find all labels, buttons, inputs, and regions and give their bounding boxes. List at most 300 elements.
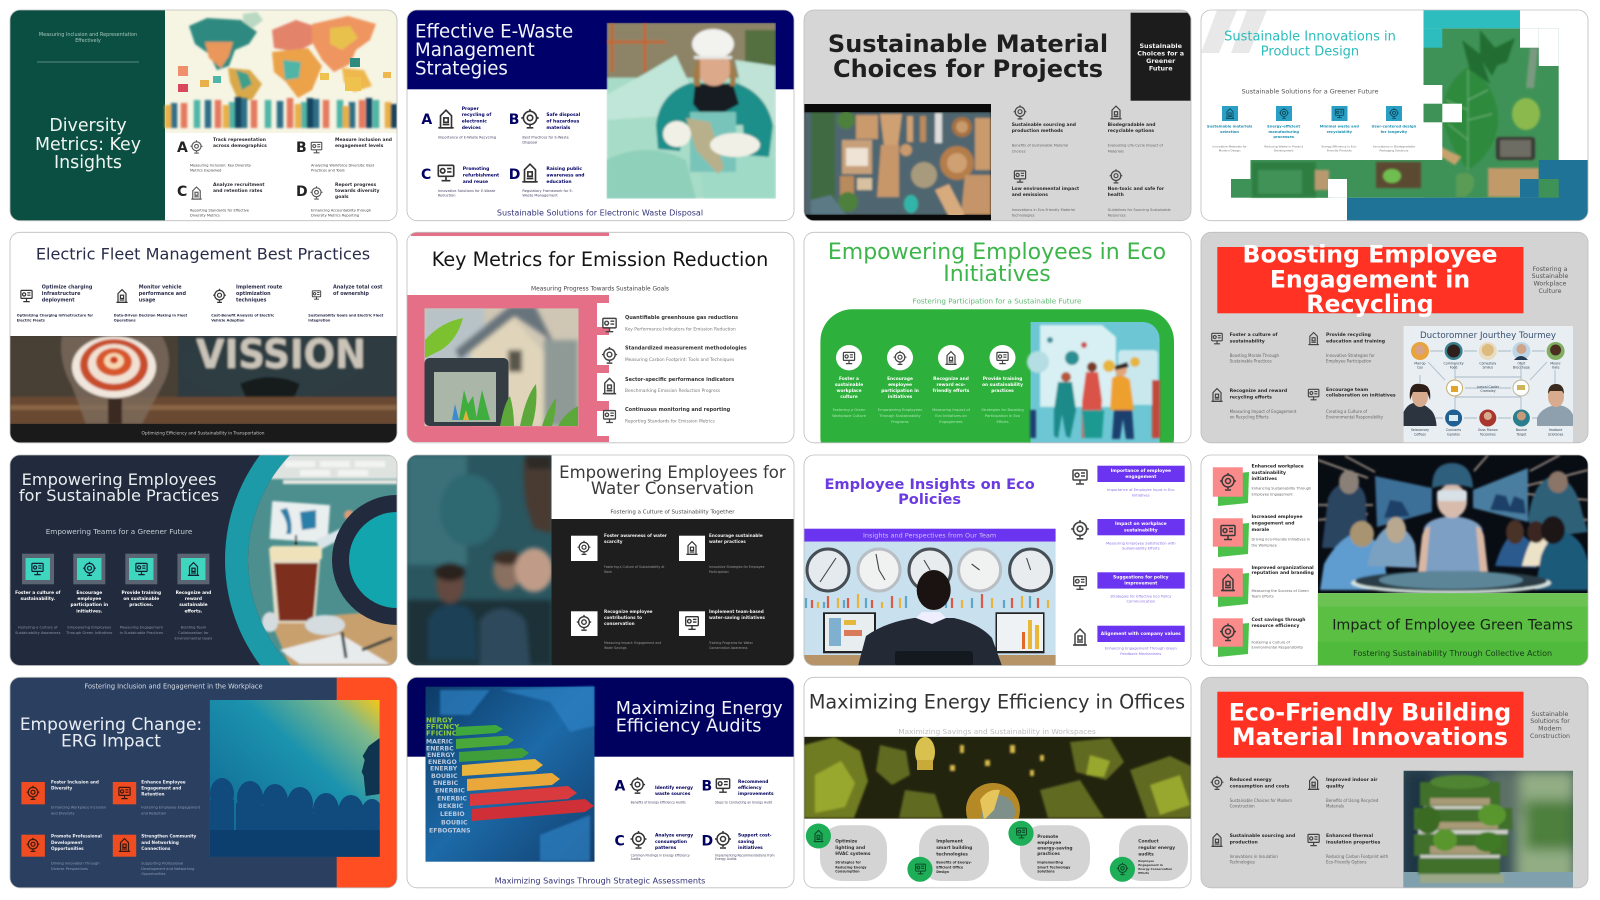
band <box>804 529 1056 542</box>
item B: engagement levels <box>335 143 384 149</box>
item: team saving: Training Programs for Water <box>708 641 754 645</box>
chart: journey diagram: Coy <box>1417 366 1423 370</box>
item D: Support cost- <box>738 832 772 838</box>
column: waste <box>1320 106 1359 153</box>
item C: Reduction <box>438 194 456 198</box>
image: efficiency rating bars <box>426 686 594 862</box>
subtitle <box>39 32 137 44</box>
item C: Diversity Metrics <box>190 213 220 217</box>
item: collaboration: Creating a Culture of <box>1326 409 1368 414</box>
item: engagement <box>113 780 201 815</box>
column: energy: Reducing Waste in Product <box>1264 145 1304 149</box>
item A: Measuring Inclusion: Key Diversity <box>190 163 251 167</box>
item: sector <box>603 377 734 394</box>
chart: journey diagram: Coffees <box>1414 432 1426 436</box>
item: suggestions: improvement <box>1124 580 1157 586</box>
item: suggestions: Communication <box>1126 600 1155 604</box>
top caption: Fostering Inclusion and Engagement in the Workplace <box>84 683 263 691</box>
title: Policies <box>898 491 961 508</box>
item: reward <box>932 345 971 424</box>
image: efficiency rating bars: FFICINCY <box>426 730 463 738</box>
subtitle: Effectively <box>75 38 101 44</box>
item A: waste sources <box>655 791 691 797</box>
item: practices <box>679 533 764 574</box>
illustration: team <box>1027 322 1160 443</box>
item: awareness: Foster awareness of water <box>604 533 668 538</box>
item: standardized: Measuring Carbon Footprint: Tools and Techniques <box>625 357 735 363</box>
side label: Greener <box>1146 57 1176 65</box>
item C <box>614 831 693 861</box>
item: enhanced: sustainability <box>1252 470 1286 476</box>
item: alignment <box>1073 626 1185 656</box>
item: education: Innovative Strategies for <box>1326 353 1375 358</box>
item: air quality: Benefits of Using Recycled <box>1326 798 1379 803</box>
item: energy costs: Reduced energy <box>1230 777 1272 783</box>
image: efficiency rating bars: MAERIC <box>426 738 453 746</box>
item: enhanced: Enhancing Sustainability Through <box>1252 487 1311 491</box>
panel: Water Conservation <box>407 455 794 666</box>
item: collaboration: collaboration on initiatives <box>1326 392 1396 398</box>
image: man watching clocks and dashboards <box>804 542 1056 666</box>
item: morale: Driving Eco-Friendly Initiatives in <box>1252 537 1310 541</box>
image: vision target and bulb <box>10 331 397 424</box>
side text: Sustainable <box>1532 711 1569 718</box>
item: low impact: Low environmental impact <box>1012 186 1080 192</box>
item: awareness: Fostering a Culture of Sustainability at <box>604 565 665 569</box>
column: materials: Innovative Materials for <box>1212 145 1248 149</box>
image: green building model <box>1403 770 1575 888</box>
item: practices: Innovative Strategies for Employee <box>709 565 764 569</box>
chart: journey diagram: Meonc <box>1550 362 1561 366</box>
item: morale <box>1213 514 1310 557</box>
item: inclusion: and Diversity <box>51 811 75 815</box>
item: monitoring: Continuous monitoring and reporting <box>625 407 731 413</box>
item: development: Driving Innovation Through <box>51 862 100 866</box>
item: reputation: reputation and branding <box>1252 570 1314 576</box>
title: Sustainable Innovations in <box>1224 30 1396 44</box>
chart: journey diagram: Ispratos <box>1447 432 1460 436</box>
item A: Track representation <box>213 137 266 143</box>
image: efficiency rating bars: EFBOGTANS <box>429 828 471 834</box>
item A <box>177 137 267 172</box>
item: audits: Employee <box>1138 859 1154 863</box>
panel: Electric Fleet <box>10 232 397 443</box>
column: user centered: for longevity <box>1381 130 1408 134</box>
item: route: optimization <box>236 291 271 297</box>
item B: B <box>296 140 307 156</box>
item: culture: Foster a culture of <box>15 590 61 596</box>
title <box>824 476 1035 508</box>
item: culture <box>1212 332 1279 364</box>
item: route: techniques <box>236 298 266 304</box>
item B: B <box>509 112 519 128</box>
title <box>616 699 783 737</box>
item: air quality: Materials <box>1326 804 1344 808</box>
item: recognize: Collaboration for <box>178 631 209 635</box>
item B: Disposal <box>522 141 537 145</box>
item: alignment: Alignment with company values <box>1101 631 1181 637</box>
item: audits: Energy Conservation <box>1138 867 1172 871</box>
item: awareness: Work <box>604 570 612 574</box>
image: efficiency rating bars: BOUBIC <box>441 820 468 826</box>
item: standardized <box>602 346 747 363</box>
item A: Benefits of Energy Efficiency Audits <box>631 800 686 804</box>
image: efficiency rating bars: FFICNCY <box>426 723 460 731</box>
item A: A <box>614 779 626 795</box>
item: culture: Foster a <box>839 376 859 382</box>
item: community: Opportunities <box>141 872 166 876</box>
item C: Promoting <box>463 166 489 172</box>
item: sourcing: Choices <box>1012 149 1026 153</box>
chart: journey diagram: Cunnants <box>1446 428 1462 432</box>
header: Water Conservation <box>591 479 754 498</box>
item: recognize: Recognize and <box>176 590 211 596</box>
item: culture: Boosting Morale Through <box>1230 353 1279 358</box>
title: Maximizing Energy <box>616 699 783 719</box>
item: culture: culture <box>840 394 858 400</box>
title: Strategies <box>415 58 508 80</box>
item: community: Strengthen Community <box>141 834 197 838</box>
item: recognize <box>174 554 212 640</box>
pink block <box>407 295 609 442</box>
item B: Recommend <box>738 779 768 785</box>
item B: improvements <box>738 791 774 797</box>
item: biodegradable: recyclable options <box>1108 128 1154 134</box>
title <box>19 470 219 505</box>
chart: journey diagram: Oate <box>1552 366 1559 370</box>
item D: Energy Audits <box>715 857 737 861</box>
item: importance: Importance of employee <box>1111 468 1171 474</box>
image: efficiency rating bars: ENEBIC <box>433 780 459 787</box>
item: non-toxic: Non-toxic and safe for <box>1108 186 1165 192</box>
item D: Regulatory Framework for E- <box>522 189 574 193</box>
header: Fostering a Culture of Sustainability Together <box>610 510 735 516</box>
item B <box>702 779 774 804</box>
item C: Audits <box>631 857 641 861</box>
chart: journey diagram: Marrop <box>1414 362 1426 366</box>
chart: journey diagram: Tecoomes <box>1479 432 1496 436</box>
item: importance <box>1073 466 1185 498</box>
chart: journey diagram <box>1404 326 1573 443</box>
item A: Identify energy <box>655 785 693 791</box>
title <box>1217 240 1524 318</box>
item: training: Provide training <box>983 376 1022 382</box>
item: participation: participation in <box>881 388 919 394</box>
item: culture: Fostering a Culture of <box>18 626 58 630</box>
item D: Enhancing Accountability through <box>311 208 371 212</box>
item: community: Development and Networking <box>141 867 194 871</box>
panel: Sustainable Practices <box>10 385 575 735</box>
item: participation: Empowering Employees <box>878 408 922 412</box>
panel: Building Materials <box>1201 677 1588 888</box>
chart: journey diagram: Commoncity <box>1444 362 1464 366</box>
item: importance: Importance of Employee Input in Eco <box>1107 488 1175 492</box>
footer bar: Optimizing Efficiency and Sustainability in Transportation <box>142 430 265 436</box>
item: low impact: Innovations in Eco-Friendly Material <box>1012 208 1075 212</box>
item: contributions: Recognize employee <box>604 609 653 614</box>
item A: A <box>421 112 432 128</box>
title: Engagement in <box>1270 265 1470 293</box>
item: community: Supporting Professional <box>141 862 183 866</box>
panel: Recycling Engagement <box>1201 232 1588 443</box>
item: engagement: Enhance Employee <box>141 780 186 784</box>
item C: C <box>177 184 187 200</box>
title block: Impact of Employee Green Teams <box>1332 618 1573 634</box>
item: lighting: Optimize <box>835 838 857 844</box>
column: user centered <box>1372 106 1417 153</box>
title <box>828 30 1108 83</box>
band: Insights and Perspectives from Our Team <box>863 531 996 539</box>
item: culture: sustainability. <box>21 596 55 602</box>
title: Effective E-Waste <box>415 22 573 42</box>
item: alignment: Feedback Mechanisms <box>1120 652 1161 656</box>
item: air quality: quality <box>1326 784 1344 790</box>
item: participation: Encourage <box>887 376 913 382</box>
item D: Implementing Recommendations from <box>715 853 774 857</box>
item A: Metrics Explained <box>190 168 221 172</box>
side text: Construction <box>1530 733 1570 740</box>
side text <box>1532 266 1569 295</box>
item: team saving <box>679 609 765 650</box>
title block <box>1318 593 1588 666</box>
item: non-toxic: health <box>1108 192 1124 198</box>
item: monitor: performance and <box>139 291 187 297</box>
item C: and reuse <box>463 179 488 185</box>
image: iced drink on desk <box>240 455 400 666</box>
chart: journey diagram: Bouine <box>1516 428 1527 432</box>
item A: across demographics <box>213 143 267 149</box>
item: cost <box>308 284 384 322</box>
item: recognize: Environmental Goals <box>174 636 212 640</box>
item: community <box>113 834 197 876</box>
subtitle: Measuring Inclusion and Representation <box>39 32 137 38</box>
item: culture: Sustainable Practices <box>1230 358 1272 364</box>
item: suggestions <box>1074 572 1185 604</box>
item: participation: Empowering Employees <box>67 626 111 630</box>
item: energy costs <box>1211 776 1292 808</box>
title: Employee Insights on Eco <box>824 476 1035 493</box>
title <box>20 715 202 751</box>
item: smart building: Benefits of Energy- <box>936 861 972 865</box>
item: employee practices: Smart Technology <box>1037 865 1071 869</box>
item: employee practices: Solutions <box>1037 870 1055 874</box>
image: world map and crowd <box>165 10 397 133</box>
item: reputation: Measuring the Success of Green <box>1252 589 1309 593</box>
subtitle: Fostering Participation for a Sustainable Future <box>913 296 1082 306</box>
item A: recycling of <box>462 112 491 118</box>
item: employee practices: practices <box>1037 851 1060 857</box>
title: Electric Fleet Management Best Practices <box>36 244 370 264</box>
column: waste: recyclability <box>1327 130 1353 134</box>
item: sourcing: Benefits of Sustainable Material <box>1012 144 1068 148</box>
title: Recycling <box>1306 290 1434 318</box>
item: air quality <box>1308 777 1379 808</box>
item: training: Participation in Eco <box>985 414 1021 418</box>
title <box>35 116 141 173</box>
item C: Reporting Standards for Effective <box>190 208 249 212</box>
item C: and retention rates <box>213 188 263 194</box>
item: reward <box>1211 388 1297 420</box>
subtitle: Maximizing Savings and Sustainability in Workspaces <box>898 727 1096 736</box>
item: route: Vehicle Adoption <box>211 318 245 322</box>
item: contributions: Water Savings <box>604 646 627 650</box>
item: morale: Increased employee <box>1252 514 1303 520</box>
column: energy: Energy-efficient <box>1267 125 1300 129</box>
item: sourcing <box>1012 105 1076 153</box>
item: smart building: Efficient Office <box>936 865 964 869</box>
item: training <box>120 554 164 635</box>
item: suggestions: Strategies for Effective Eco Policy <box>1110 594 1172 598</box>
item: reward: reward eco- <box>936 382 966 388</box>
item: sourcing: Innovations in Insulation <box>1230 854 1278 859</box>
image: kraft materials flat lay <box>804 104 991 221</box>
item: reputation <box>1213 565 1314 607</box>
title: Key Metrics for Emission Reduction <box>432 248 768 271</box>
image: efficiency rating bars: NERGY <box>426 717 454 725</box>
item: cost: Fostering a Culture of <box>1252 640 1291 644</box>
column: waste: Energy Efficiency in Eco- <box>1321 145 1357 149</box>
item: lighting <box>806 824 887 881</box>
item D: D <box>296 184 308 200</box>
item: charging: infrastructure <box>42 291 81 297</box>
title: for Sustainable Practices <box>19 486 219 505</box>
item: reward: friendly efforts <box>933 388 970 394</box>
item: practices: Encourage sustainable <box>709 533 763 538</box>
item: impact: Sustainability Efforts <box>1122 547 1160 551</box>
quote marks <box>1201 10 1267 53</box>
image: house and monitor <box>424 306 578 426</box>
side text: Modern <box>1538 726 1562 732</box>
item C: patterns <box>655 845 677 851</box>
item: culture <box>832 345 867 418</box>
item: route: Cost-Benefit Analysis of Electric <box>211 313 274 317</box>
item: audits: Engagement in <box>1138 863 1163 867</box>
chart: journey diagram: Ouss Rionon <box>1478 428 1498 432</box>
item: audits: regular energy <box>1138 845 1175 851</box>
item A <box>421 106 496 140</box>
item: suggestions: Suggestions for policy <box>1113 574 1169 580</box>
item D: Raising public <box>546 166 582 172</box>
image: efficiency rating bars: ENERBY <box>430 766 458 772</box>
header <box>552 455 794 519</box>
chart: journey diagram: Sciotones <box>1548 432 1564 436</box>
item: participation: employee <box>77 596 101 602</box>
item: recognize: sustainable <box>179 602 208 608</box>
item: reward: Recognize and reward <box>1230 388 1287 394</box>
item D: Report progress <box>335 182 376 188</box>
item A: A <box>177 140 188 156</box>
item B: Safe disposal <box>546 112 581 118</box>
item: non-toxic: Guidelines for Sourcing Sustainable <box>1108 208 1171 212</box>
item: biodegradable: Biodegradable and <box>1108 122 1156 128</box>
item: greenhouse: Key Performance Indicators for Emission Reduction <box>625 326 736 332</box>
item C <box>177 182 265 217</box>
item: greenhouse: Quantifiable greenhouse gas reductions <box>625 315 738 321</box>
item: culture: Sustainability Awareness <box>15 631 61 635</box>
item: smart building: smart building <box>936 845 972 851</box>
title <box>415 22 573 80</box>
item: development <box>21 834 102 871</box>
item C: C <box>421 167 431 183</box>
chart: journey diagram: Brocchope <box>1513 366 1530 370</box>
subtitle: Sustainable Solutions for a Greener Future <box>1242 88 1378 96</box>
item: smart building: Design <box>936 870 950 874</box>
item: insulation: Enhanced thermal <box>1326 833 1374 839</box>
item: audits: audits <box>1138 852 1154 858</box>
item: participation: employee <box>888 382 912 388</box>
item C: C <box>614 834 625 850</box>
item D: awareness and <box>546 172 585 178</box>
item: monitoring <box>604 407 731 424</box>
title: Empowering Change: <box>20 715 202 735</box>
side text: Workplace <box>1534 280 1567 288</box>
item: employee practices: Promote <box>1037 834 1058 840</box>
item: impact: sustainability <box>1124 528 1158 534</box>
item: participation <box>878 345 922 424</box>
chart: journey diagram: Ofult <box>1518 362 1526 366</box>
title: Management <box>415 40 535 61</box>
item: development: Opportunities <box>51 846 84 851</box>
item: standardized: Standardized measurement methodologies <box>625 346 747 352</box>
title: Boosting Employee <box>1243 240 1497 268</box>
item: morale: the Workplace <box>1252 543 1277 547</box>
item D: D <box>509 167 520 183</box>
item: culture: workplace <box>836 388 862 394</box>
diagram heading: Ductoromner Jourthey Tourmey <box>1420 330 1556 340</box>
item: monitor: usage <box>139 298 156 304</box>
item: training: Strategies for Boosting <box>981 408 1024 412</box>
item: smart building <box>907 825 989 882</box>
item: training: in Sustainable Practices <box>120 631 163 635</box>
side label: Sustainable <box>1139 42 1183 50</box>
item: cost <box>1213 617 1305 657</box>
item: education <box>1308 332 1385 364</box>
title block: Fostering Sustainability Through Collective Action <box>1353 649 1552 658</box>
panel: Energy Audits <box>407 677 794 888</box>
item: culture: Workplace Culture <box>832 414 867 418</box>
item: route: Implement route <box>236 284 283 290</box>
side label: Future <box>1149 65 1173 73</box>
item: energy costs: Construction <box>1230 804 1255 808</box>
item: importance: Initiatives <box>1132 494 1150 498</box>
image: glowing globe and foliage <box>804 737 1191 837</box>
item: contributions: Measuring Impact: Engagement and <box>604 641 661 645</box>
item B: Practices and Tools <box>311 168 345 172</box>
item D: Diversity Metrics Reporting <box>311 213 359 217</box>
item: importance: engagement <box>1125 474 1156 480</box>
title: Insights <box>54 153 122 173</box>
image: vision target and bulb: VISSION <box>196 332 366 378</box>
item: culture: Fostering a Green <box>833 408 866 412</box>
column: energy: manufacturing <box>1268 130 1299 134</box>
image: efficiency rating bars: ENERGO <box>428 759 457 766</box>
item: impact: Impact on workplace <box>1115 521 1167 527</box>
title: ERG Impact <box>61 731 161 751</box>
image: efficiency rating bars: BEKBIC <box>438 803 464 810</box>
item: lighting: HVAC systems <box>835 851 871 857</box>
title: Choices for Projects <box>833 55 1103 83</box>
item: lighting: lighting and <box>835 845 865 851</box>
item: charging: deployment <box>42 298 75 304</box>
chart: journey diagram: Food <box>1450 366 1457 370</box>
item B: B <box>702 779 712 795</box>
item D: D <box>702 834 713 850</box>
item: participation: initiatives <box>888 394 913 400</box>
image: efficiency rating bars: ENERBIC <box>437 796 467 802</box>
item: monitor: Monitor vehicle <box>139 284 182 290</box>
column: materials <box>1207 106 1253 153</box>
image: silhouettes <box>210 700 383 857</box>
